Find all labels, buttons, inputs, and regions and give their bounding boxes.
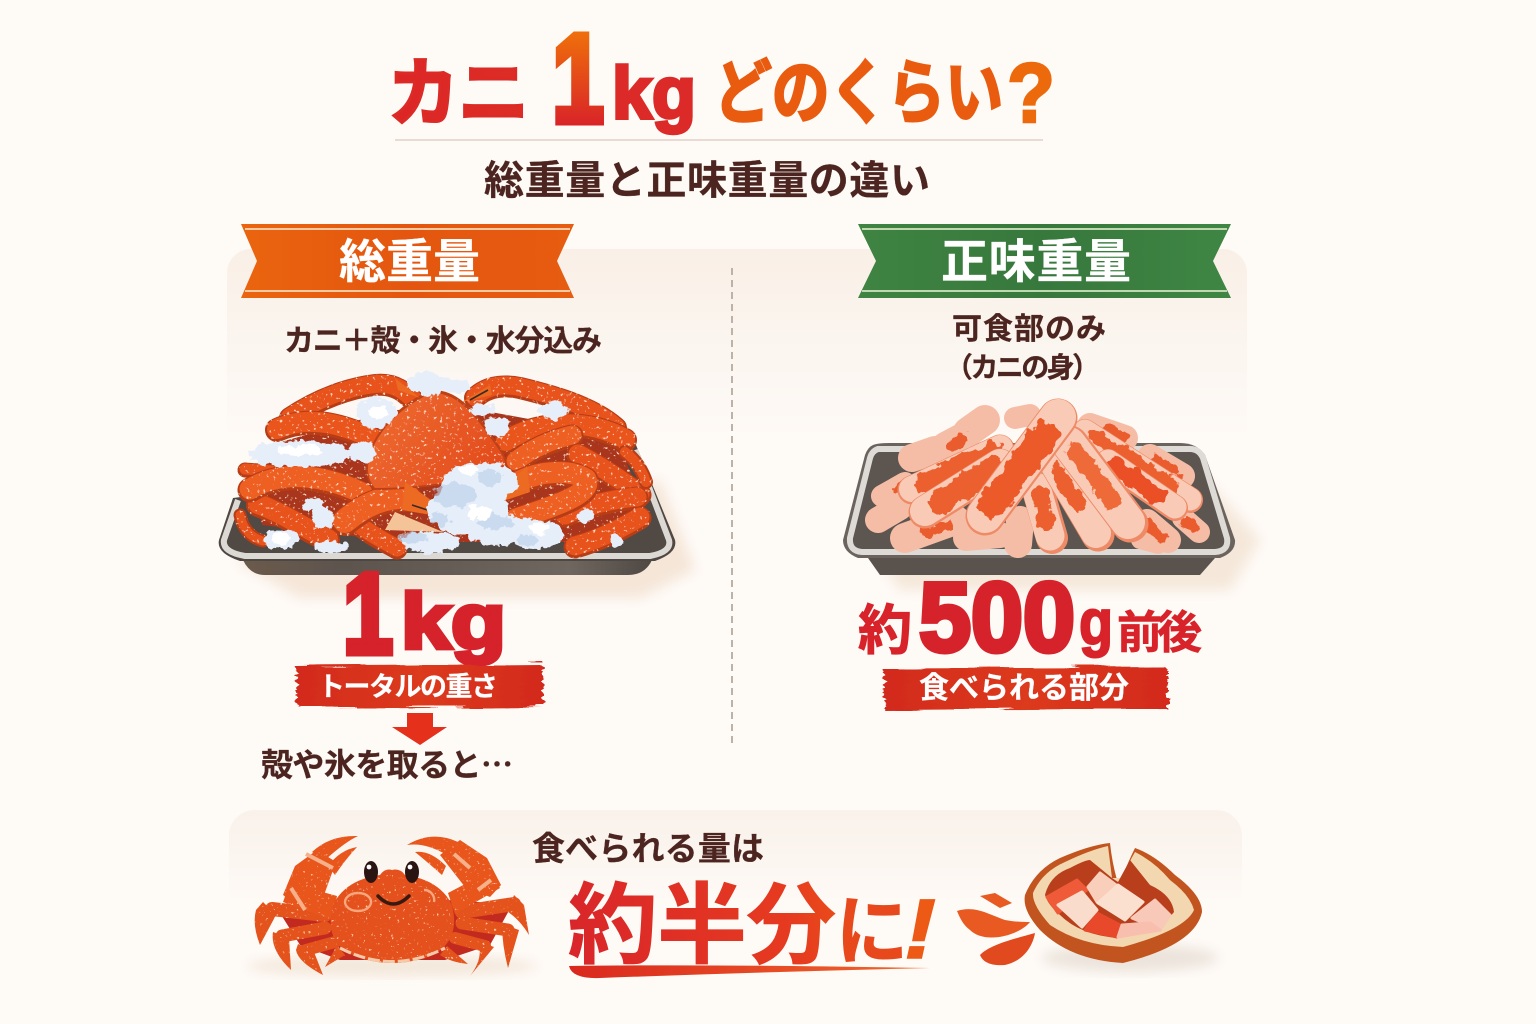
title: kg — [612, 53, 696, 134]
crab sticks — [878, 415, 1199, 545]
tray shadow — [235, 480, 695, 598]
value: about 500g: 前後 — [1117, 607, 1202, 658]
front stick 7 — [925, 464, 1000, 512]
metal tray — [219, 445, 675, 575]
illustration: whole crab on tray with ice — [219, 372, 695, 598]
panel: comparison — [227, 249, 1247, 794]
icon: crab shell with meat — [1025, 843, 1218, 972]
back and outer sticks — [878, 415, 1199, 545]
title: カニ — [388, 52, 529, 135]
value: 1kg — [343, 551, 506, 678]
front stick 3 — [1085, 431, 1190, 500]
value: about 500g: 500 — [919, 562, 1075, 672]
arm bands — [291, 854, 491, 910]
value: about 500g: 約 — [858, 601, 912, 661]
crab shell — [366, 390, 507, 490]
crab body — [331, 870, 454, 963]
brush label: edible portion — [883, 667, 1168, 710]
text: net description — [945, 313, 1106, 383]
shell rim — [340, 948, 445, 962]
ribbon: net weight: 正味重量 — [941, 235, 1131, 288]
text: net description: 可食部のみ — [952, 313, 1106, 346]
brush underline — [569, 965, 930, 978]
crab legs and arms — [255, 836, 529, 976]
webbing — [275, 900, 512, 960]
crushed ice — [248, 372, 623, 553]
value: about 500g — [858, 562, 1202, 672]
front stick 6 — [912, 448, 1000, 490]
shell swirl marks — [345, 890, 434, 911]
text: net description: （カニの身） — [945, 352, 1100, 383]
brush label: total weight — [296, 664, 543, 708]
headline: about half: に — [836, 890, 908, 975]
claw tips — [385, 378, 530, 532]
headline: about half: ! — [904, 882, 936, 976]
panel: conclusion — [229, 810, 1242, 1000]
title — [388, 8, 1055, 149]
text: edible amount: 食べられる量は — [532, 830, 764, 867]
ice highlights — [271, 405, 550, 544]
ribbon: gross weight — [241, 224, 574, 298]
subtitle: 総重量と正味重量の違い — [484, 159, 930, 203]
crab face — [364, 861, 419, 904]
ice shading — [398, 470, 539, 546]
front stick 1 — [1036, 487, 1052, 538]
ribbon: net weight — [858, 224, 1231, 298]
arrow: down — [392, 713, 447, 745]
value: 1kg: kg — [401, 577, 506, 665]
front stick 5 — [1069, 444, 1130, 524]
headline: about half: 約半分 — [568, 876, 836, 975]
front stick 4 — [1108, 461, 1175, 508]
brush label: edible portion: 食べられる部分 — [919, 672, 1129, 705]
meat chunks — [1047, 873, 1170, 937]
front stick 2 — [1054, 462, 1098, 535]
front stick 8 — [985, 417, 1058, 516]
title: ? — [1007, 46, 1055, 140]
illustration: crab meat on tray — [843, 415, 1260, 590]
icon: smiling crab — [247, 836, 537, 976]
text: gross description: カニ＋殻・氷・水分込み — [284, 325, 602, 358]
tray shadow — [880, 450, 1260, 590]
value: 1kg: 1 — [343, 551, 393, 678]
ribbon: gross weight: 総重量 — [339, 235, 480, 288]
text: after removing shell and ice: 殻や氷を取ると… — [261, 740, 513, 786]
metal tray — [843, 443, 1235, 575]
icon: shell fragments — [957, 893, 1035, 965]
value: about 500g: g — [1079, 586, 1113, 658]
brush label: total weight: トータルの重さ — [318, 672, 498, 702]
title: どのくらい — [714, 54, 1003, 132]
crab legs — [240, 384, 646, 549]
title: 1 — [552, 8, 604, 149]
